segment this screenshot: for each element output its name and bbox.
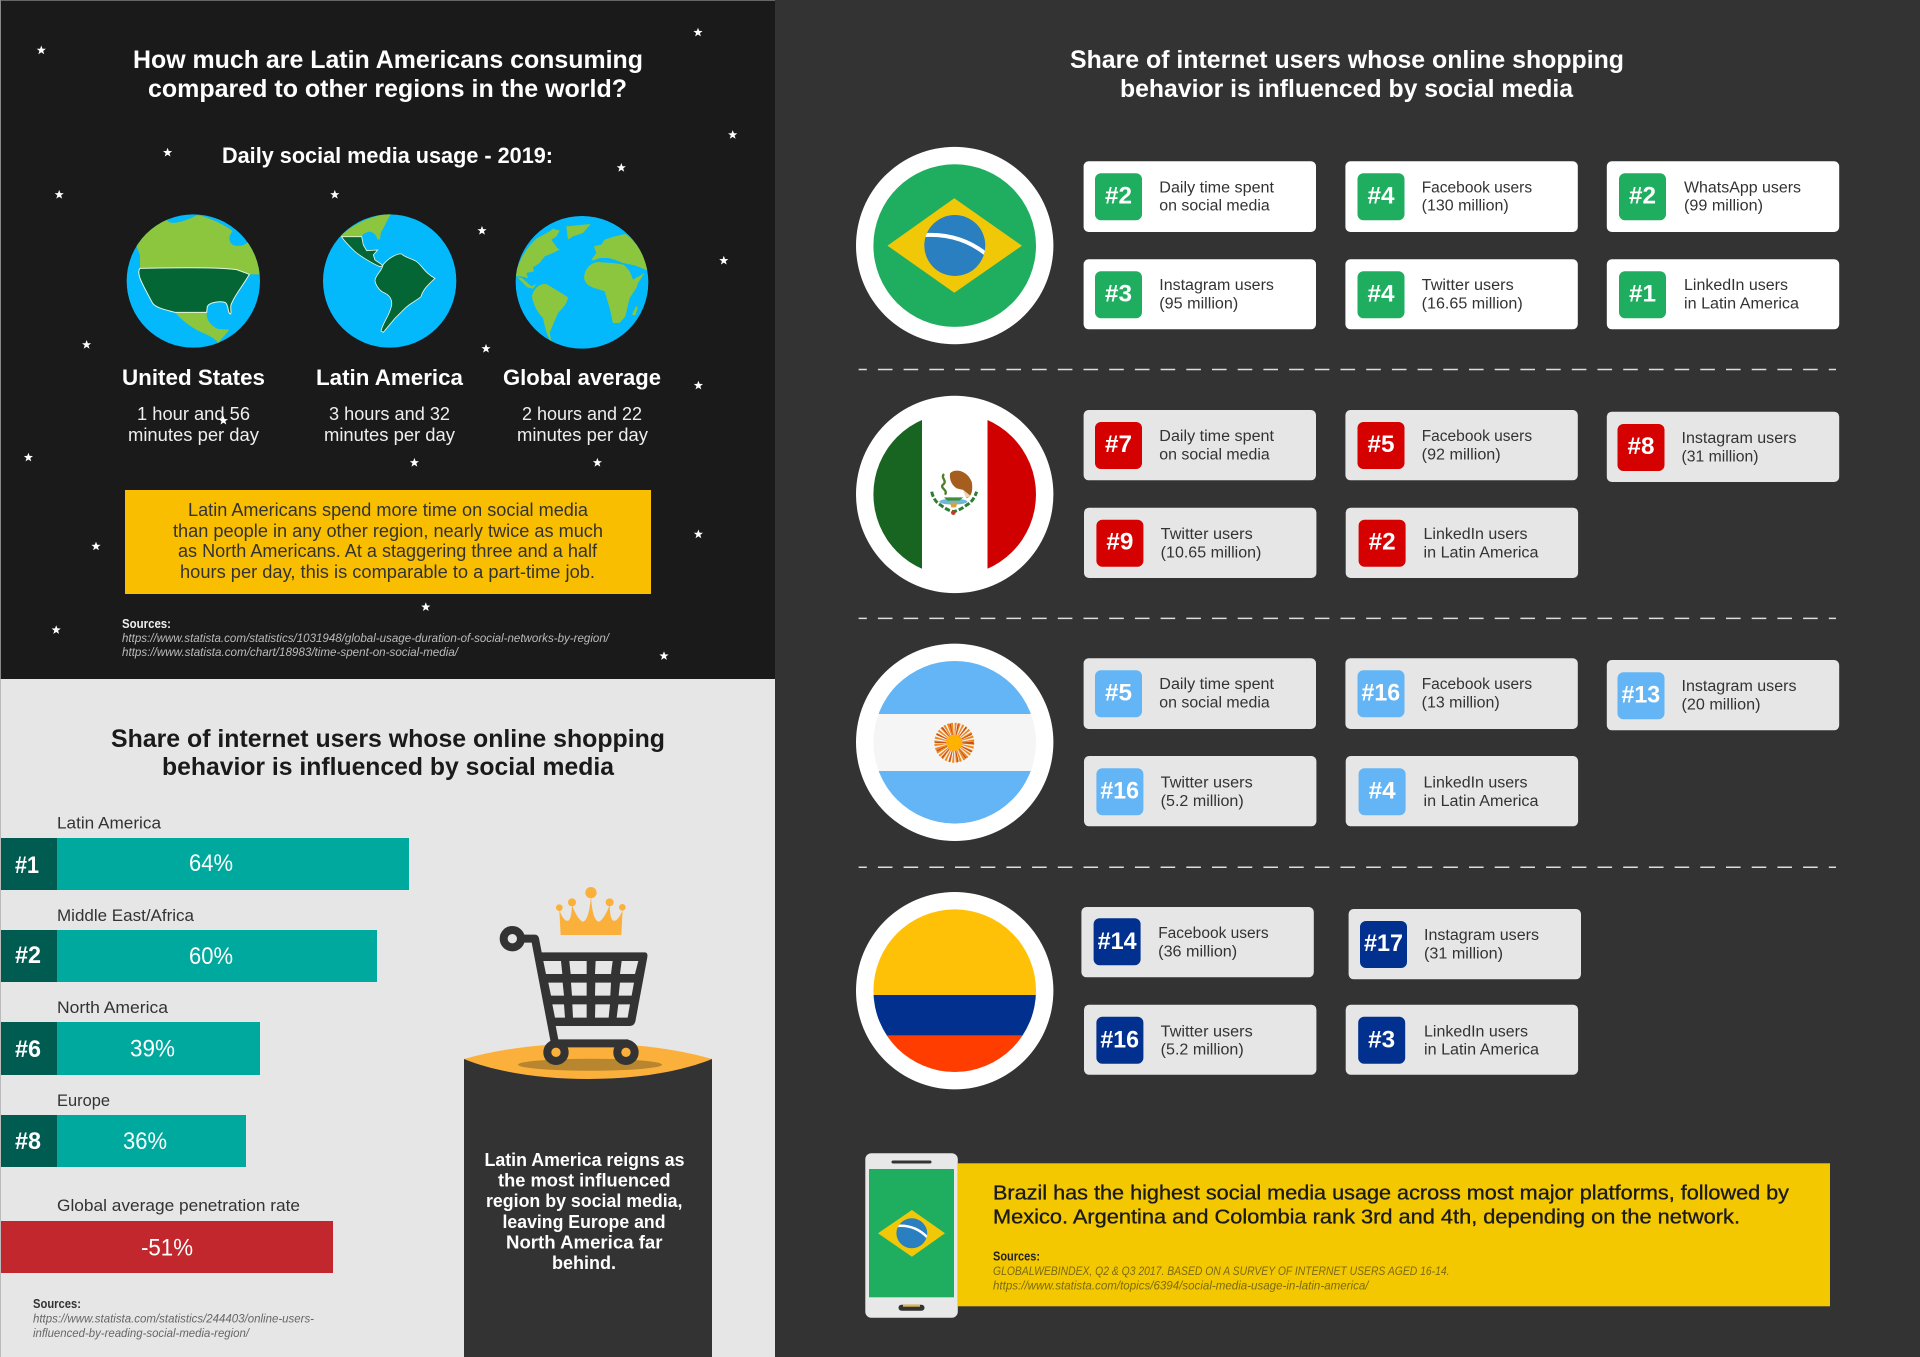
card: Colombia Twitter: #16 — [1100, 1026, 1139, 1053]
sources: usage: https://www.statista.com/chart/18983/time-spent-on-social-media/ — [122, 645, 460, 659]
callout: time spent: hours per day, this is comparable to a part-time job. — [180, 562, 595, 582]
card: Mexico Twitter: #9 — [1106, 529, 1133, 556]
bar: Latin America: 64% — [189, 850, 233, 877]
sources: usage: https://www.statista.com/statistics/1031948/global-usage-duration-of-social-networks-by-region/ — [122, 631, 611, 645]
bar: Middle East/Africa: #2 — [15, 942, 41, 969]
Argentina cards — [1084, 658, 1839, 826]
heading: country panel: behavior is influenced by social media — [1120, 75, 1574, 103]
bar: Europe — [1, 1091, 246, 1167]
card: Brazil LinkedIn: in Latin America — [1684, 296, 1799, 312]
heading: shopping influence — [111, 725, 665, 781]
card: Colombia Facebook: Facebook users — [1158, 925, 1269, 942]
card: Brazil LinkedIn: #1 — [1629, 280, 1656, 307]
card: Mexico Instagram: #8 — [1628, 433, 1654, 460]
icon: shopping cart with crown — [504, 887, 647, 1061]
card: Argentina Instagram: (20 million) — [1682, 696, 1760, 713]
bar: Middle East/Africa — [1, 906, 377, 982]
card: Argentina Facebook: (13 million) — [1422, 694, 1500, 711]
card: Brazil Twitter — [1345, 259, 1578, 329]
card: Brazil Instagram — [1084, 259, 1316, 329]
card: Brazil Twitter: (16.65 million) — [1422, 296, 1523, 312]
icon: Mexican coat of arms — [932, 471, 977, 515]
card: Brazil Facebook — [1345, 161, 1578, 232]
globe: United States — [127, 214, 260, 348]
card: Colombia Instagram: (31 million) — [1424, 945, 1503, 962]
card: Argentina Facebook: Facebook users — [1422, 676, 1532, 693]
bar: Europe: 36% — [123, 1128, 167, 1155]
label: Global average: Global average — [503, 365, 661, 390]
card: Brazil WhatsApp: #2 — [1629, 182, 1656, 209]
label: United States — [122, 365, 265, 445]
card: Argentina LinkedIn: #4 — [1369, 778, 1396, 805]
text: Latin America reigns: North America far — [506, 1233, 662, 1253]
card: Argentina Twitter: (5.2 million) — [1161, 793, 1244, 810]
card: Mexico LinkedIn — [1346, 508, 1578, 578]
text: Latin America reigns: region by social media, — [486, 1191, 682, 1211]
bar: North America: North America — [57, 998, 169, 1017]
sources: shopping: https://www.statista.com/statistics/244403/online-users- — [33, 1312, 314, 1326]
sources: summary: Sources: — [993, 1250, 1040, 1264]
bar: North America: 39% — [130, 1036, 175, 1062]
text: Latin America reigns: leaving Europe and — [502, 1212, 666, 1232]
Colombia cards — [1081, 907, 1581, 1075]
bar: Europe: Europe — [57, 1091, 110, 1110]
card: Argentina daily time: Daily time spent — [1159, 676, 1275, 693]
sources: usage — [122, 617, 611, 659]
card: Colombia LinkedIn — [1346, 1005, 1578, 1075]
card: Brazil Twitter: #4 — [1368, 280, 1395, 307]
flag: Colombia — [856, 892, 1053, 1089]
card: Colombia LinkedIn: #3 — [1368, 1026, 1395, 1053]
card: Argentina LinkedIn: in Latin America — [1424, 793, 1539, 810]
flag: Brazil — [856, 147, 1053, 344]
heading: country panel — [1070, 46, 1624, 103]
sources: summary: https://www.statista.com/topics/6394/social-media-usage-in-latin-america/ — [993, 1278, 1370, 1292]
Brazil cards — [1084, 161, 1839, 329]
card: Argentina Instagram: Instagram users — [1682, 678, 1797, 695]
card: Colombia Instagram: Instagram users — [1424, 927, 1539, 944]
heading: consumption question: compared to other regions in the world? — [148, 75, 627, 103]
card: Brazil daily time: #2 — [1105, 182, 1132, 209]
card: Brazil Instagram: Instagram users — [1159, 277, 1274, 294]
card: Argentina LinkedIn — [1346, 756, 1578, 826]
label: Latin America: Latin America — [316, 365, 464, 390]
card: Brazil LinkedIn — [1607, 259, 1839, 329]
flag: Mexico — [856, 396, 1053, 593]
subheading: daily usage: Daily social media usage - 2019: — [222, 143, 553, 168]
bar: global average — [1, 1196, 333, 1273]
heading: shopping influence: behavior is influenced by social media — [162, 753, 615, 781]
card: Colombia Facebook: #14 — [1098, 928, 1137, 955]
card: Brazil daily time: on social media — [1159, 198, 1270, 215]
globe: Latin America — [323, 214, 456, 348]
card: Argentina Twitter: Twitter users — [1161, 775, 1253, 792]
card: Colombia Twitter: (5.2 million) — [1161, 1042, 1244, 1059]
card: Brazil daily time — [1084, 161, 1316, 232]
text: Latin America reigns: Latin America reigns as — [484, 1150, 684, 1170]
sources: summary: GLOBALWEBINDEX, Q2 & Q3 2017. BASED ON A SURVEY OF INTERNET USERS AGED 16-14. — [993, 1264, 1450, 1278]
card: Mexico LinkedIn: LinkedIn users — [1424, 526, 1528, 543]
bar: North America — [1, 998, 260, 1075]
bar: Latin America: #1 — [15, 852, 39, 879]
callout: time spent: as North Americans. At a staggering three and a half — [178, 541, 598, 561]
bar: Middle East/Africa: 60% — [189, 943, 233, 970]
card: Mexico Facebook: #5 — [1368, 431, 1394, 458]
bar: global average: Global average penetration rate — [57, 1196, 300, 1215]
callout: time spent — [125, 490, 651, 594]
star field — [24, 28, 737, 660]
card: Colombia Instagram: #17 — [1364, 930, 1403, 957]
card: Mexico daily time: Daily time spent — [1159, 428, 1275, 445]
sources: shopping: influenced-by-reading-social-media-region/ — [33, 1326, 251, 1340]
card: Mexico LinkedIn: #2 — [1369, 529, 1396, 556]
sources: summary — [993, 1250, 1450, 1292]
card: Argentina Instagram: #13 — [1622, 681, 1660, 708]
card: Mexico Twitter: Twitter users — [1161, 526, 1253, 543]
label: United States: minutes per day — [128, 425, 259, 445]
bar: North America: #6 — [15, 1036, 41, 1063]
summary text: Mexico. Argentina and Colombia rank 3rd and 4th, depending on the network. — [993, 1205, 1740, 1228]
bar: Latin America: Latin America — [57, 814, 162, 832]
bar: Middle East/Africa: Middle East/Africa — [57, 906, 195, 925]
pedestal — [464, 1044, 712, 1357]
card: Colombia LinkedIn: LinkedIn users — [1424, 1023, 1528, 1040]
card: Argentina Instagram — [1607, 660, 1839, 730]
card: Colombia Facebook — [1081, 907, 1314, 977]
label: Global average: minutes per day — [517, 425, 648, 445]
card: Mexico daily time: #7 — [1105, 431, 1132, 458]
label: Global average — [503, 365, 661, 445]
card: Mexico daily time — [1084, 410, 1316, 480]
heading: shopping influence: Share of internet users whose online shopping — [111, 725, 665, 753]
card: Brazil daily time: Daily time spent — [1159, 179, 1275, 196]
card: Brazil LinkedIn: LinkedIn users — [1684, 277, 1788, 294]
label: Global average: 2 hours and 22 — [522, 404, 642, 424]
card: Brazil Instagram: #3 — [1105, 280, 1132, 307]
summary text: Brazil has the highest social media usage across most major platforms, followed by — [993, 1181, 1790, 1204]
card: Mexico daily time: on social media — [1159, 446, 1270, 464]
card: Brazil WhatsApp — [1607, 161, 1839, 232]
bar: global average: -51% — [141, 1234, 193, 1262]
heading: country panel: Share of internet users whose online shopping — [1070, 46, 1624, 74]
card: Argentina Facebook — [1345, 658, 1578, 729]
card: Mexico Facebook — [1345, 410, 1578, 480]
heading: consumption question — [133, 46, 643, 103]
text: Latin America reigns — [484, 1150, 684, 1273]
card: Mexico Facebook: Facebook users — [1422, 428, 1532, 445]
sources: shopping — [33, 1297, 314, 1340]
card: Colombia Instagram — [1349, 909, 1581, 979]
sources: usage: Sources: — [122, 617, 171, 631]
globe: global average — [515, 216, 650, 349]
banner: summary — [958, 1163, 1830, 1306]
card: Brazil Facebook: Facebook users — [1422, 179, 1532, 196]
panel: shopping influence by region — [0, 679, 775, 1357]
card: Argentina daily time: on social media — [1159, 694, 1270, 711]
icon: sun of May — [941, 729, 968, 756]
card: Mexico Instagram: Instagram users — [1682, 430, 1797, 447]
sources: shopping: Sources: — [33, 1297, 81, 1311]
card: Brazil Twitter: Twitter users — [1422, 277, 1514, 294]
callout: time spent: than people in any other region, nearly twice as much — [173, 521, 603, 541]
bar: Europe: #8 — [15, 1128, 41, 1155]
text: Latin America reigns: behind. — [552, 1253, 616, 1273]
card: Argentina Facebook: #16 — [1362, 679, 1400, 706]
card: Mexico Twitter: (10.65 million) — [1161, 544, 1261, 561]
card: Mexico Twitter — [1084, 508, 1316, 578]
card: Brazil Facebook: #4 — [1368, 182, 1395, 209]
card: Brazil Instagram: (95 million) — [1159, 296, 1238, 312]
card: Mexico Instagram — [1607, 412, 1839, 482]
label: Latin America: minutes per day — [324, 425, 455, 445]
summary text — [993, 1181, 1790, 1228]
heading: consumption question: How much are Latin Americans consuming — [133, 46, 643, 74]
icon: phone with Brazil flag — [865, 1153, 958, 1318]
Mexico cards — [1084, 410, 1839, 578]
bar: Latin America — [1, 814, 409, 890]
card: Colombia Twitter: Twitter users — [1161, 1023, 1253, 1040]
card: Argentina Twitter: #16 — [1100, 778, 1139, 805]
card: Argentina LinkedIn: LinkedIn users — [1424, 775, 1528, 792]
card: Brazil WhatsApp: (99 million) — [1684, 198, 1763, 215]
card: Mexico Facebook: (92 million) — [1422, 446, 1501, 464]
callout: time spent: Latin Americans spend more time on social media — [188, 500, 589, 520]
panel: daily social media usage — [0, 0, 775, 679]
card: Brazil WhatsApp: WhatsApp users — [1684, 179, 1801, 196]
label: Latin America — [316, 365, 464, 445]
card: Argentina daily time: #5 — [1105, 679, 1132, 706]
card: Colombia Facebook: (36 million) — [1158, 943, 1237, 960]
label: Latin America: 3 hours and 32 — [329, 404, 450, 424]
card: Colombia Twitter — [1084, 1005, 1316, 1075]
card: Brazil Facebook: (130 million) — [1422, 198, 1509, 215]
flag: Argentina — [856, 644, 1053, 841]
card: Mexico Instagram: (31 million) — [1682, 448, 1758, 466]
card: Mexico LinkedIn: in Latin America — [1424, 544, 1539, 561]
text: Latin America reigns: the most influenced — [498, 1170, 670, 1190]
label: United States: United States — [122, 365, 265, 390]
card: Colombia LinkedIn: in Latin America — [1424, 1042, 1539, 1059]
card: Argentina daily time — [1084, 658, 1316, 729]
label: United States: 1 hour and 56 — [137, 404, 250, 424]
card: Argentina Twitter — [1084, 756, 1316, 826]
